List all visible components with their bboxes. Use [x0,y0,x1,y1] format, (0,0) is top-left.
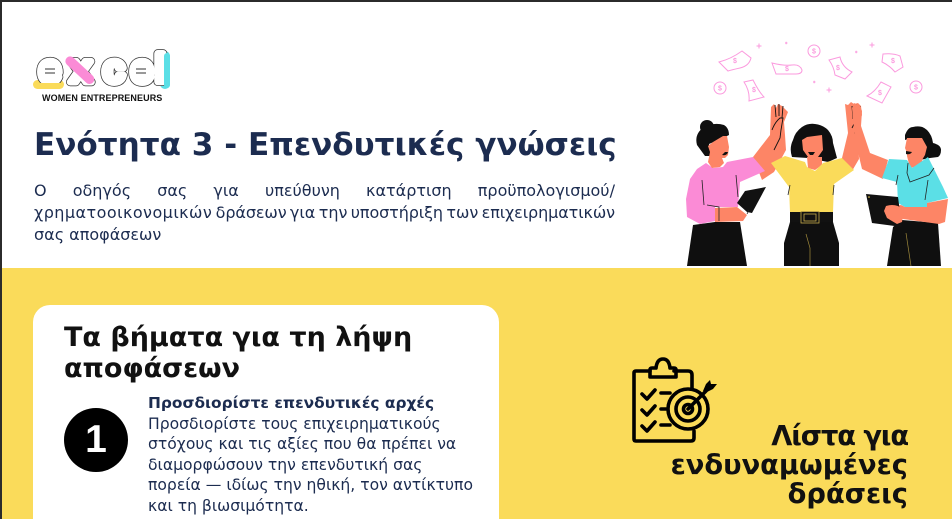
intro text: χρηματοοικονομικών [34,203,212,222]
person right: teal shirt [852,103,948,266]
side heading: ενδυναμωμένες [671,450,908,481]
intro text: Ο [34,181,47,200]
icon: clipboard with target [632,357,717,443]
illustration: money and three women high-fiving: $ [718,86,722,92]
intro text: για [290,203,315,222]
logo: excel women entrepreneurs: c [103,48,125,91]
logo: excel women entrepreneurs: e [39,48,61,91]
logo: excel women entrepreneurs [33,48,170,103]
illustration: money and three women high-fiving: $ [752,87,756,94]
yellow lower band [2,268,952,519]
step 1 text: Προσδιορίστε επενδυτικές αρχές [148,394,434,412]
illustration: money and three women high-fiving: $ [785,66,789,73]
person left: pink top [686,104,788,266]
illustration: money and three women high-fiving: $ [733,58,737,65]
intro text: για [213,181,239,200]
illustration: money and three women high-fiving: $ [891,58,895,65]
logo: excel women entrepreneurs: x [70,48,92,91]
logo: excel women entrepreneurs: e [131,48,153,91]
hands meeting [772,104,863,150]
person middle: yellow top [771,102,862,266]
logo: excel women entrepreneurs: e [131,48,153,91]
intro text: προϋπολογισμού/ [478,181,615,200]
illustration: money and three women high-fiving [686,42,948,266]
intro text: οδηγός [73,181,131,200]
intro text: υποστήριξη [351,203,443,222]
page frame edge [0,0,952,2]
step 1 text: πορεία — ιδίως την ηθική, τον αντίκτυπο [148,476,473,494]
step 1 text: διαμορφώσουν την επενδυτική σας [148,456,422,474]
side heading: Λίστα για [771,421,908,452]
illustration: money and three women high-fiving: $ [878,90,882,97]
intro text: των [446,203,478,222]
panel: decision steps [33,305,499,519]
step 1 number badge [64,408,128,472]
step 1 text: στόχους και τις αξίες που θα πρέπει να [148,435,456,453]
logo: excel women entrepreneurs: e [39,48,61,91]
falling money [714,42,922,103]
logo: excel women entrepreneurs: c [103,48,125,91]
intro text: σας αποφάσεων [34,225,161,244]
logo: excel women entrepreneurs: x [70,48,92,91]
title: Ενότητα 3 - Επενδυτικές γνώσεις [34,127,617,163]
side heading [671,421,908,510]
intro text: δράσεων [216,203,287,222]
step 1 text [148,394,473,514]
illustration: money and three women high-fiving: $ [812,48,816,56]
side heading: δράσεις [788,479,908,510]
panel heading: Τα βήματα για τη λήψη [64,322,412,353]
intro text: την [319,203,347,222]
intro text: σας [157,181,187,200]
step 1 text: Προσδιορίστε τους επιχειρηματικούς [148,414,441,432]
panel heading [64,322,412,384]
intro text: επιχειρηματικών [482,203,615,222]
panel heading: αποφάσεων [64,353,240,384]
logo: excel women entrepreneurs: l [155,48,166,91]
intro text: κατάρτιση [366,181,452,200]
intro text: υπεύθυνη [265,181,340,200]
logo tagline: WOMEN ENTREPRENEURS [42,93,162,103]
intro text [34,181,615,244]
step 1 number badge: 1 [85,418,107,461]
logo: excel women entrepreneurs: l [155,48,166,91]
illustration: money and three women high-fiving: $ [914,84,918,92]
step 1 text: και τη βιωσιμότητα. [148,496,309,514]
illustration: money and three women high-fiving: $ [836,65,840,72]
